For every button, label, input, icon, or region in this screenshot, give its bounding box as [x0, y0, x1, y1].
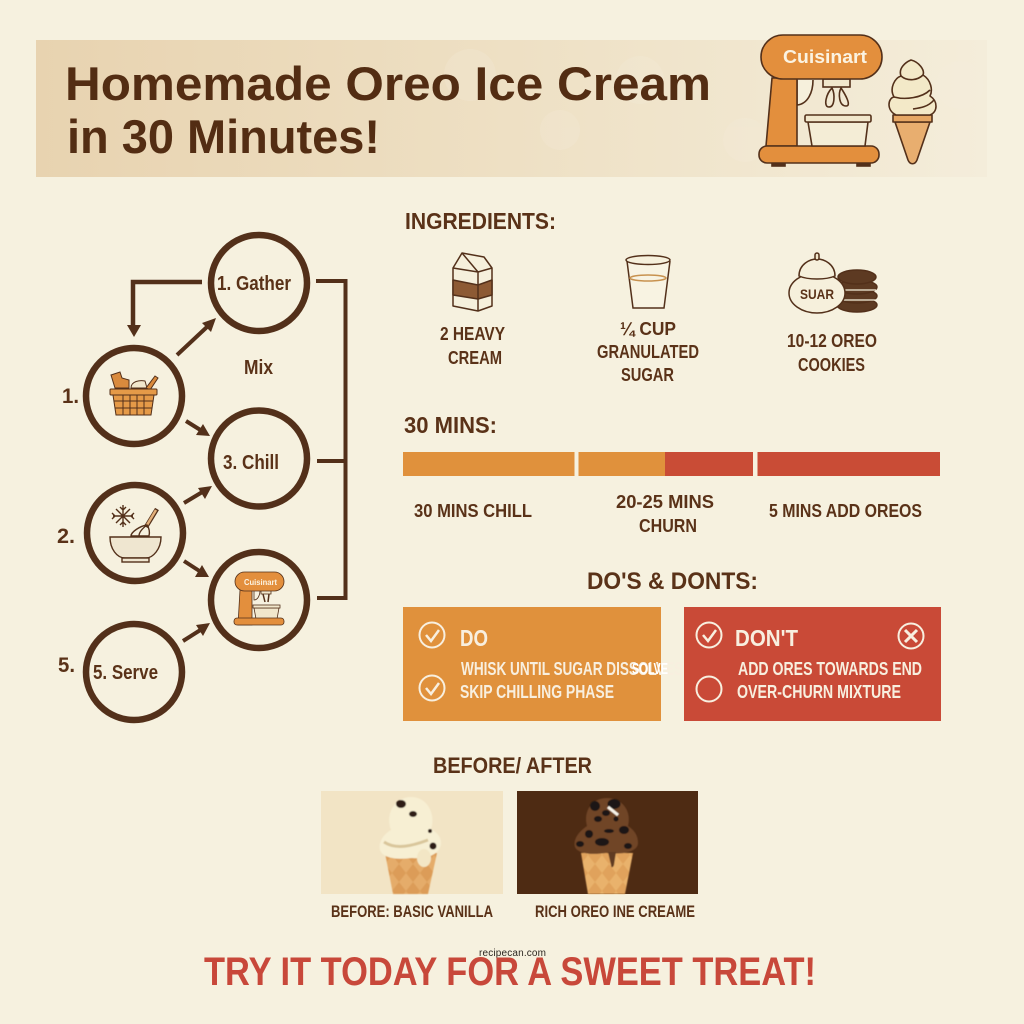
call to action: TRY IT TODAY FOR A SWEET TREAT! — [204, 950, 816, 994]
circle: whisk and bowl step — [87, 485, 183, 581]
text: oreo cookies: 10-12 OREO — [787, 330, 877, 351]
timeline bar — [403, 452, 940, 476]
timeline labels — [414, 491, 922, 536]
arrow: serve to mixer — [183, 623, 210, 641]
source credit: recipecan.com — [479, 948, 546, 959]
arrow: basket to chill — [186, 421, 210, 436]
heading: dos and donts: DO'S & DONTS: — [587, 568, 758, 595]
circle: chill: 3. Chill — [223, 452, 279, 474]
header banner — [36, 40, 987, 177]
heading: ingredients: INGREDIENTS: — [405, 208, 556, 234]
panel: before image — [321, 791, 503, 894]
text: whisk: WHISK UNTIL SUGAR DISSOLVES — [461, 659, 683, 679]
text: add oreos: ADD ORES TOWARDS END — [738, 659, 922, 679]
timeline labels: CHURN — [639, 515, 697, 536]
text: oreo cookies — [787, 330, 877, 375]
arrow: whisk to chill — [184, 486, 212, 503]
icon: check circle 2 — [420, 676, 444, 700]
icon: stand mixer — [759, 35, 882, 166]
icon: stand mixer: Cuisinart — [783, 47, 867, 67]
circle: serve: 5. Serve — [93, 662, 158, 684]
text: granulated sugar: GRANULATED — [597, 341, 699, 362]
panel: do — [403, 607, 683, 721]
circle: mixer step: Cuisinart — [244, 578, 277, 587]
text: granulated sugar: ¼ CUP — [620, 318, 676, 339]
text: granulated sugar — [597, 318, 699, 385]
heading: before after: BEFORE/ AFTER — [433, 753, 592, 778]
timeline labels: 30 MINS CHILL — [414, 500, 532, 521]
label: mix: Mix — [244, 357, 273, 379]
circle: basket step — [86, 348, 182, 444]
circle: chill — [211, 410, 307, 506]
caption: before: BEFORE: BASIC VANILLA — [331, 903, 493, 921]
heading: dont: DON'T — [735, 625, 798, 651]
title: Homemade Oreo Ice Cream — [65, 57, 711, 110]
caption: after: RICH OREO INE CREAME — [535, 903, 695, 921]
icon: sugar jar and oreos: SUAR — [800, 286, 834, 302]
icon: glass of sugar — [626, 256, 670, 308]
title: in 30 Minutes! — [67, 110, 380, 163]
icon: soft serve cone — [889, 60, 936, 164]
flow diagram — [57, 235, 346, 720]
bracket: right side connector — [316, 281, 346, 598]
icon: check circle — [696, 622, 722, 648]
icon: cream carton — [453, 253, 492, 311]
circle: gather — [211, 235, 307, 331]
title — [65, 57, 711, 163]
icon: sugar jar and oreos — [789, 253, 877, 313]
arrow: whisk to mixer — [184, 561, 209, 577]
text: oreo cookies: COOKIES — [798, 354, 865, 375]
icon: cross circle — [898, 624, 924, 648]
panel: after image — [517, 791, 698, 894]
text: heavy cream: 2 HEAVY — [440, 323, 506, 344]
panel: dont — [684, 607, 941, 721]
text: heavy cream: CREAM — [448, 347, 502, 368]
label: step 5: 5. — [58, 654, 75, 677]
arrow: basket to gather — [177, 318, 216, 355]
label: step 1: 1. — [62, 385, 79, 408]
text: granulated sugar: SUGAR — [621, 364, 674, 385]
timeline labels: 20-25 MINS — [616, 491, 714, 512]
text: over-churn: OVER-CHURN MIXTURE — [737, 682, 901, 702]
circle: serve — [86, 624, 182, 720]
icon: check circle — [420, 622, 444, 648]
circle: gather: 1. Gather — [217, 273, 291, 295]
heading: time: 30 MINS: — [404, 412, 497, 438]
text: garbled overlay: SOLVE — [632, 661, 668, 678]
circle: mixer step — [211, 552, 307, 648]
text: skip chilling: SKIP CHILLING PHASE — [460, 682, 614, 702]
icon: empty circle — [696, 676, 722, 702]
arrow: gather back to basket — [127, 282, 202, 337]
text: heavy cream — [440, 323, 506, 368]
timeline labels: 5 MINS ADD OREOS — [769, 500, 922, 521]
label: step 2: 2. — [57, 525, 75, 548]
heading: do: DO — [460, 625, 488, 651]
